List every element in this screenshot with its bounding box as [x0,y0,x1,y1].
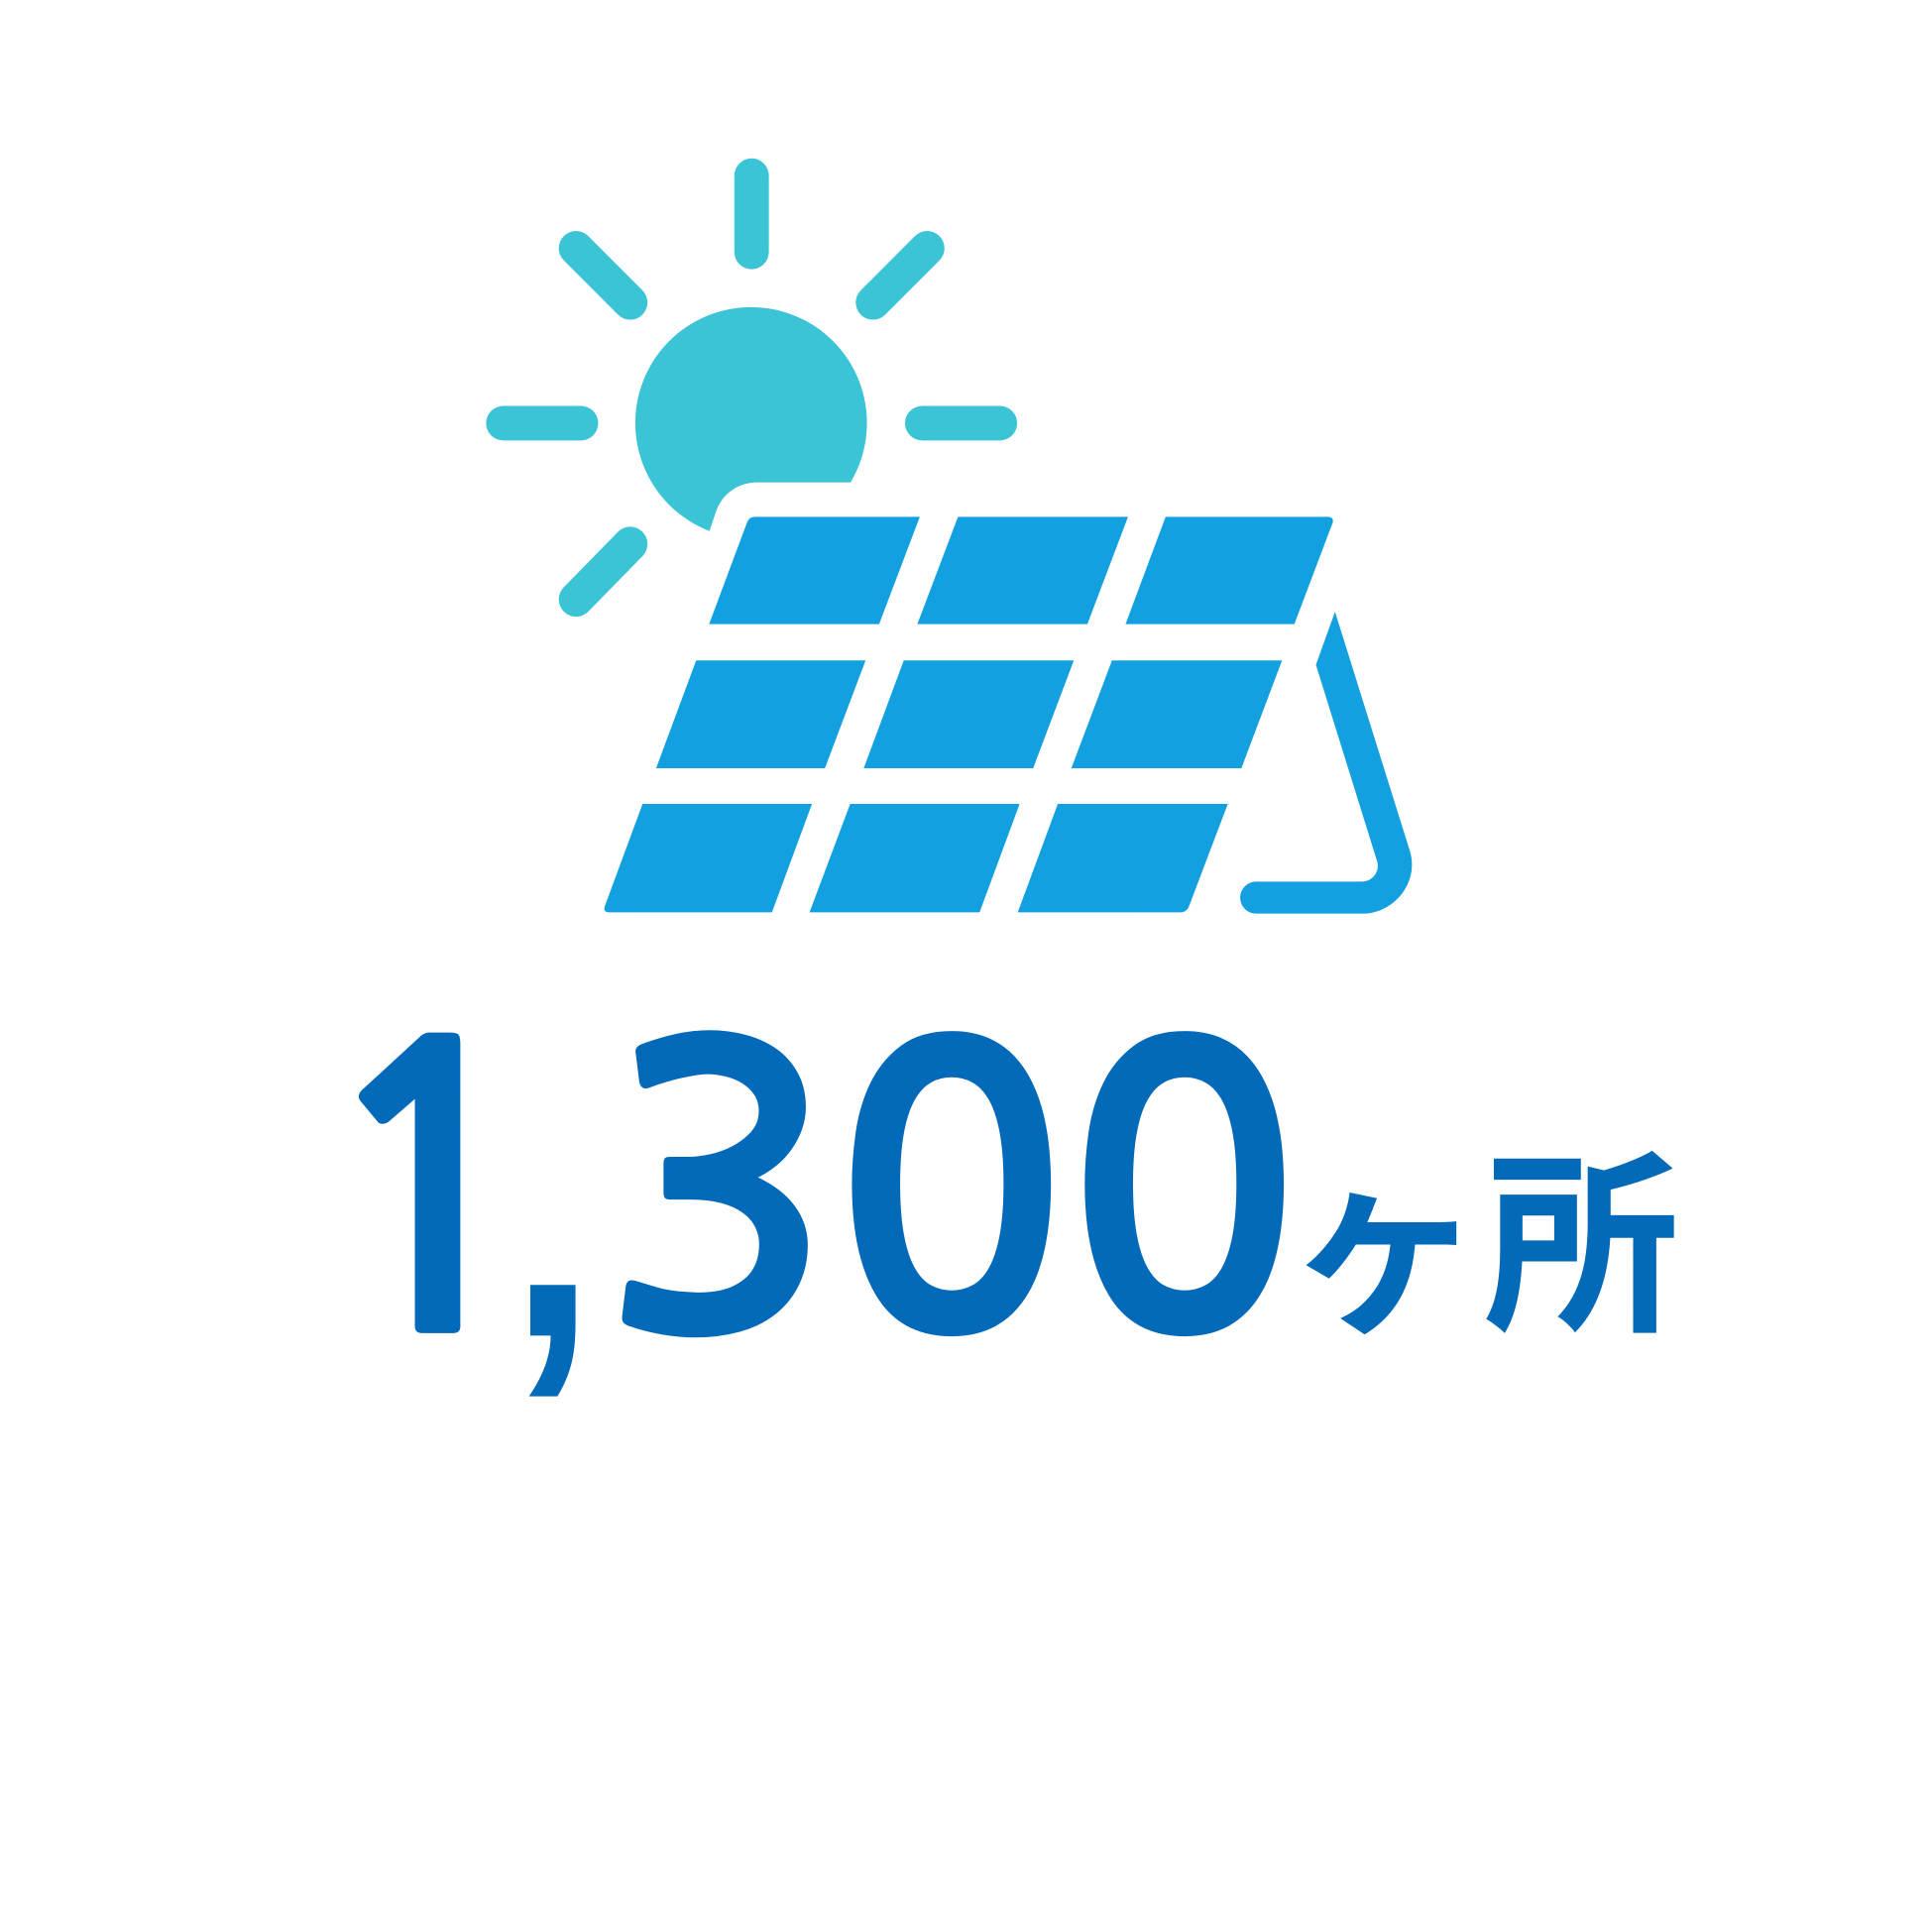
icon: solar panel [605,516,1412,914]
digit 1: 1 [310,1002,547,1389]
panel cells [605,516,1333,912]
panel stand [1240,612,1412,914]
sun disc [635,307,867,531]
figure: 1,300 [310,907,1302,1436]
digits 300: 300 [601,1003,1302,1390]
sun rays [504,175,1000,600]
comma: , [487,907,619,1436]
unit: ヶ所: ヶ所 [1287,1088,1679,1372]
icon: sun [504,175,1000,600]
